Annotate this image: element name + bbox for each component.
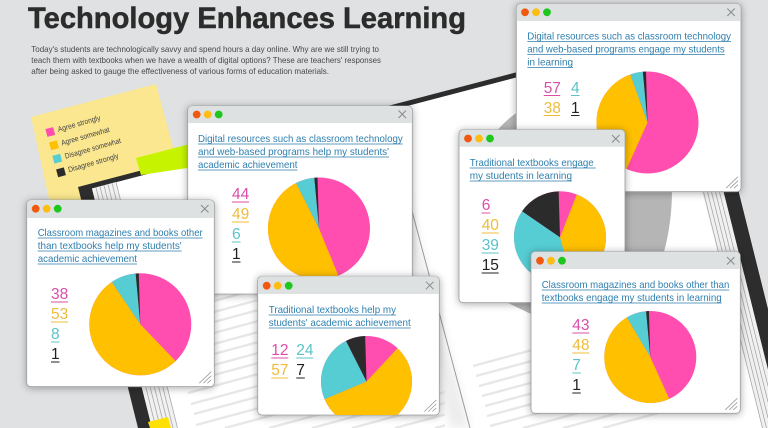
legend: agree strongly bbox=[45, 113, 102, 137]
yellow bookmark bbox=[148, 417, 171, 428]
values: 1 bbox=[572, 377, 581, 394]
question heading: Classroom magazines and books other bbox=[38, 228, 203, 239]
window: digital resources engage bbox=[516, 4, 741, 192]
gutter line bbox=[385, 110, 470, 428]
question heading: my students in learning bbox=[470, 171, 572, 182]
question heading: Classroom magazines and books other than bbox=[542, 280, 729, 291]
intro text bbox=[31, 44, 381, 76]
question heading bbox=[269, 305, 411, 329]
question heading: Digital resources such as classroom technology bbox=[527, 32, 732, 42]
lime bookmark tab bbox=[136, 144, 194, 175]
right page text lines bbox=[473, 317, 679, 428]
legend: disagree somewhat: Disagree somewhat bbox=[64, 136, 123, 161]
values: 39 bbox=[482, 237, 499, 254]
question heading bbox=[470, 158, 596, 182]
question heading: and web-based programs help my students' bbox=[198, 147, 389, 158]
legend: agree strongly: Agree strongly bbox=[57, 113, 102, 134]
values: 12 bbox=[271, 342, 289, 359]
window: classroom magazines engage bbox=[531, 252, 740, 413]
question heading bbox=[38, 228, 203, 265]
values: 40 bbox=[482, 217, 499, 234]
pie chart bbox=[89, 273, 191, 375]
resize grip bbox=[725, 398, 737, 410]
values: 53 bbox=[51, 306, 68, 323]
values bbox=[572, 317, 590, 394]
sticky note legend bbox=[31, 84, 190, 240]
values: 6 bbox=[482, 197, 490, 214]
page curl shadow bbox=[480, 100, 672, 314]
values: 8 bbox=[51, 326, 60, 343]
values: 43 bbox=[572, 317, 590, 334]
question heading: and web-based programs engage my students bbox=[527, 44, 725, 56]
close icon bbox=[727, 257, 734, 264]
question heading: Traditional textbooks engage bbox=[470, 158, 594, 169]
legend: agree somewhat bbox=[49, 125, 111, 150]
values bbox=[51, 286, 68, 363]
window buttons bbox=[521, 8, 551, 16]
window: traditional textbooks help achievement bbox=[258, 276, 439, 427]
window buttons bbox=[536, 257, 566, 265]
question heading: than textbooks help my students' bbox=[38, 241, 182, 252]
values: 4 bbox=[571, 80, 580, 97]
question heading: academic achievement bbox=[198, 160, 298, 171]
values: 1 bbox=[51, 346, 60, 363]
legend: disagree strongly bbox=[56, 151, 120, 177]
pie chart bbox=[514, 191, 606, 283]
question heading bbox=[527, 32, 732, 68]
values bbox=[232, 186, 250, 263]
intro text: Today's students are technologically savvy and spend hours a day online. Why are we still trying to bbox=[31, 44, 379, 54]
window: traditional textbooks engage bbox=[459, 130, 625, 303]
resize grip bbox=[424, 400, 436, 412]
close icon bbox=[426, 282, 434, 289]
close icon bbox=[727, 8, 735, 16]
pie chart bbox=[604, 311, 696, 403]
pie chart bbox=[321, 336, 412, 415]
resize grip bbox=[199, 372, 211, 383]
pie chart bbox=[596, 72, 698, 174]
values: 1 bbox=[571, 100, 580, 117]
title: Technology Enhances Learning bbox=[28, 2, 466, 35]
resize grip bbox=[726, 177, 738, 188]
window buttons bbox=[32, 205, 62, 213]
values: 6 bbox=[232, 226, 241, 243]
question heading bbox=[198, 134, 403, 171]
close icon bbox=[398, 110, 406, 118]
values: 38 bbox=[51, 286, 68, 303]
legend: agree somewhat: Agree somewhat bbox=[60, 125, 111, 147]
question heading: Traditional textbooks help my bbox=[269, 305, 397, 316]
values bbox=[482, 197, 499, 274]
close icon bbox=[612, 135, 620, 142]
window: classroom magazines help achievement bbox=[27, 200, 214, 387]
legend: disagree strongly: Disagree strongly bbox=[67, 151, 120, 174]
intro text: after being asked to gauge the effectiveness of various forms of education materials. bbox=[31, 66, 329, 76]
window buttons bbox=[193, 111, 223, 118]
question heading: Digital resources such as classroom technology bbox=[198, 134, 403, 145]
window buttons bbox=[263, 282, 293, 290]
values: 7 bbox=[572, 357, 581, 374]
window buttons bbox=[464, 135, 494, 142]
values bbox=[544, 80, 580, 117]
values bbox=[271, 342, 314, 379]
question heading: textbooks engage my students in learning bbox=[542, 293, 722, 304]
question heading bbox=[542, 280, 729, 304]
left page stack edge bbox=[92, 182, 178, 428]
intro text: teach them with textbooks when we have a wealth of digital options? These are teachers' responses bbox=[31, 55, 381, 65]
values: 57 bbox=[271, 362, 289, 379]
values: 1 bbox=[232, 246, 241, 263]
question heading: academic achievement bbox=[38, 254, 137, 265]
pie chart bbox=[268, 178, 370, 280]
values: 49 bbox=[232, 206, 249, 223]
close icon bbox=[201, 205, 208, 212]
left page text lines bbox=[188, 251, 445, 428]
values: 7 bbox=[296, 362, 305, 379]
values: 24 bbox=[296, 342, 314, 359]
values: 57 bbox=[544, 80, 561, 97]
window: digital resources help achievement bbox=[188, 106, 412, 294]
right page stack edge bbox=[663, 34, 768, 428]
values: 48 bbox=[572, 337, 590, 354]
values: 38 bbox=[544, 100, 561, 117]
question heading: in learning bbox=[527, 58, 573, 68]
values: 15 bbox=[482, 257, 499, 274]
shaded gutter bbox=[378, 110, 470, 428]
values: 44 bbox=[232, 186, 250, 203]
question heading: students' academic achievement bbox=[269, 318, 411, 329]
legend: disagree somewhat bbox=[52, 136, 123, 164]
